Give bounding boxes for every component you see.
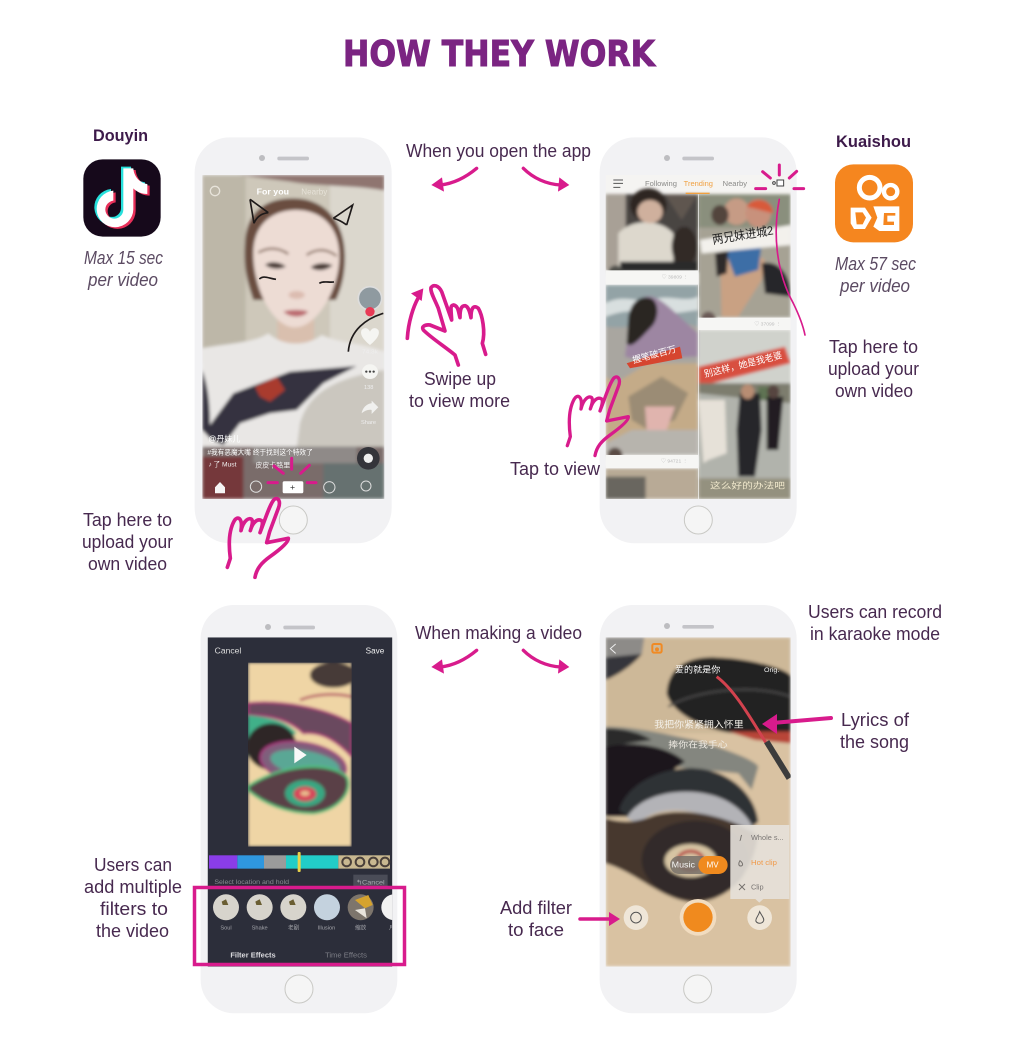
phone: Douyin editor: Soul <box>220 926 232 932</box>
phone: Douyin feed: ♪ 了 Must <box>208 461 237 469</box>
text: users can add filters <box>84 855 182 941</box>
text: when you open the app: When you open the app <box>406 141 591 161</box>
text: lyrics of the song <box>840 710 910 752</box>
clip menu <box>730 825 789 903</box>
text: karaoke mode <box>808 602 942 644</box>
text: add filter to face: Add filter <box>500 898 572 918</box>
phone: Kuaishou feed: ♡ 37099 ⋮ <box>754 322 781 328</box>
music/mv toggle <box>670 856 704 874</box>
arrow: when you open the app <box>431 168 569 192</box>
search icon <box>210 186 220 196</box>
text: add filter to face <box>500 898 572 940</box>
phone: Douyin editor <box>201 605 407 1013</box>
text: users can add filters: the video <box>96 921 169 941</box>
phone: Kuaishou feed: ♡ 94721 ⋮ <box>661 459 688 465</box>
icon: Kuaishou logo <box>835 164 913 242</box>
bottom nav <box>215 482 225 493</box>
phone: Douyin editor: 老剧 <box>288 924 300 932</box>
text: Douyin max length: Max 15 sec <box>84 248 163 268</box>
phone: Kuaishou karaoke camera: MV <box>707 861 719 870</box>
phone: Kuaishou karaoke camera: Hot clip <box>751 858 777 867</box>
phone: Kuaishou karaoke camera: Whole s... <box>751 833 784 842</box>
phone: Douyin editor: Shake <box>252 926 268 932</box>
text: tap here to upload (Douyin) <box>82 510 173 574</box>
filter thumbnails <box>213 894 407 920</box>
text: users can add filters: filters to <box>100 899 168 919</box>
text: lyrics of the song: Lyrics of <box>841 710 910 730</box>
phone: Douyin feed: 皮皮卡路里 <box>255 460 290 469</box>
arrow: when making a video <box>431 650 569 674</box>
phone: Douyin editor: Time Effects <box>325 950 367 959</box>
text: Douyin max length <box>84 248 163 290</box>
phone: Kuaishou karaoke camera: Orig. <box>764 667 779 674</box>
phone: Douyin feed <box>195 137 392 543</box>
highlight box: filters <box>194 888 404 964</box>
phone: Kuaishou feed: 别这样，她是我老婆 <box>703 349 783 379</box>
text: swipe up <box>409 369 510 411</box>
caption: @丹妹儿 <box>208 434 240 444</box>
icon: swipe up hand <box>407 286 486 365</box>
text: swipe up: Swipe up <box>424 369 496 389</box>
phone: Kuaishou karaoke camera: 捧你在我手心 <box>668 738 728 749</box>
phone: Douyin feed: #我有恶魔大嘴 终于找到这个特效了 <box>207 447 313 456</box>
phone: Douyin feed: Nearby <box>301 187 327 196</box>
phone: Douyin feed: 74.3k <box>362 349 378 355</box>
text: tap here to upload (Douyin): own video <box>88 554 167 574</box>
side buttons <box>358 287 382 310</box>
heading: Douyin: Douyin <box>93 126 148 145</box>
text: when making a video: When making a video <box>415 623 582 643</box>
text: Kuaishou max length <box>835 254 916 296</box>
arrow: add filter <box>580 912 620 926</box>
text: tap here to upload (Kuaishou): Tap here to <box>829 337 918 357</box>
text: swipe up: to view more <box>409 391 510 411</box>
text: add filter to face: to face <box>508 920 564 940</box>
phone: Kuaishou feed: Nearby <box>723 179 747 188</box>
phone: Douyin feed: Share <box>361 420 376 426</box>
phone: Douyin editor: Cancel <box>215 646 242 655</box>
heading: Kuaishou: Kuaishou <box>836 132 911 151</box>
phone: Douyin feed: + <box>290 482 295 492</box>
text: karaoke mode: in karaoke mode <box>810 624 940 644</box>
phone: Kuaishou feed: Trending <box>684 179 713 188</box>
text: tap here to upload (Kuaishou): own video <box>835 381 913 401</box>
phone: Douyin editor: ↰Cancel <box>356 879 385 886</box>
video frame <box>247 662 357 847</box>
phone: Kuaishou karaoke camera <box>600 605 797 1013</box>
text: karaoke mode: Users can record <box>808 602 942 622</box>
timeline <box>209 855 237 869</box>
phone: Kuaishou feed: Following <box>645 179 677 188</box>
pink tap burst: upload button Kuaishou <box>756 165 805 335</box>
toolbar <box>610 644 616 653</box>
phone: Douyin editor: Illusion <box>318 926 335 932</box>
arrow: lyrics <box>762 714 831 734</box>
icon: Douyin logo <box>83 159 161 237</box>
text: tap to view: Tap to view <box>510 459 601 479</box>
text: Kuaishou max length: Max 57 sec <box>835 254 916 274</box>
phone: Kuaishou feed <box>600 137 797 543</box>
phone: Kuaishou feed: ♡ 39809 ⋮ <box>662 274 688 280</box>
phone: Douyin editor: 月 <box>389 925 395 932</box>
phone: Kuaishou feed: 握笔破百万 <box>631 343 677 365</box>
lyrics: 爱的就是你 <box>675 664 721 675</box>
phone: Kuaishou karaoke camera: 我把你紧紧拥入怀里 <box>654 718 744 729</box>
text: tap here to upload (Kuaishou) <box>828 337 919 401</box>
text: users can add filters: add multiple <box>84 877 182 897</box>
tabs: For you <box>257 186 289 196</box>
phone: Douyin editor: 缩放 <box>355 924 367 932</box>
title: HOW THEY WORK <box>343 34 656 75</box>
phone: Douyin editor: Select location and hold <box>214 879 290 886</box>
phone: Kuaishou karaoke camera: Music <box>672 861 695 870</box>
text: tap here to upload (Douyin): Tap here to <box>83 510 172 530</box>
phone: Douyin feed: 138 <box>364 385 373 391</box>
phone: Kuaishou feed: 两兄妹进城2 <box>711 223 774 247</box>
panel: Kuaishou brand <box>835 132 916 296</box>
text: users can add filters: Users can <box>94 855 172 875</box>
text: Kuaishou max length: per video <box>839 276 910 296</box>
panel: Douyin brand <box>83 126 163 290</box>
icon: tap hand Kuaishou <box>567 377 628 456</box>
text: lyrics of the song: the song <box>840 732 909 752</box>
phone: Douyin editor: Filter Effects <box>230 950 276 959</box>
text: tap here to upload (Douyin): upload your <box>82 532 173 552</box>
phone: Kuaishou karaoke camera: Clip <box>751 883 764 892</box>
phone: Douyin editor: Save <box>366 646 385 655</box>
phone: Kuaishou feed: 这么好的办法吧 <box>710 480 786 490</box>
text: Douyin max length: per video <box>87 270 158 290</box>
pink tap burst <box>268 458 316 483</box>
icon: tap hand Douyin <box>227 499 288 577</box>
camera buttons <box>624 905 648 930</box>
text: tap here to upload (Kuaishou): upload your <box>828 359 919 379</box>
